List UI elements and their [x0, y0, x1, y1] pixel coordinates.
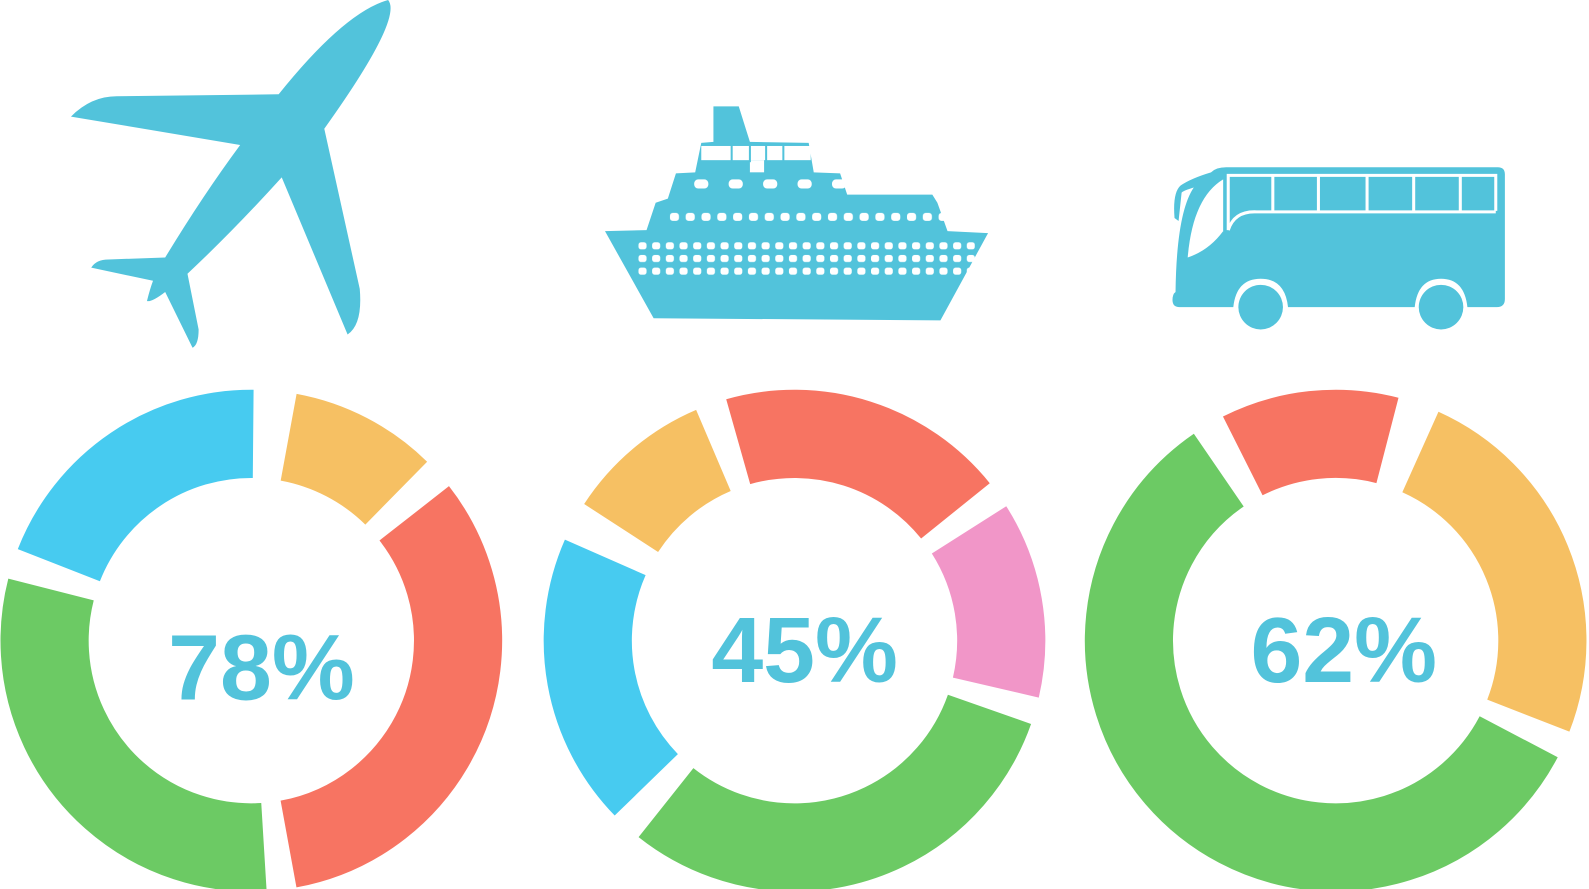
label: 45%: 45% — [711, 598, 898, 702]
chart: donut 62% — [1057, 361, 1589, 889]
chart: donut 45% — [502, 348, 1087, 889]
chart: donut 78% — [0, 350, 542, 889]
icon: airplane — [71, 0, 391, 348]
icon: bus — [1172, 167, 1505, 329]
label: 62%: 62% — [1250, 598, 1437, 702]
label: 78%: 78% — [168, 615, 355, 719]
icon: cruise ship — [605, 106, 988, 320]
